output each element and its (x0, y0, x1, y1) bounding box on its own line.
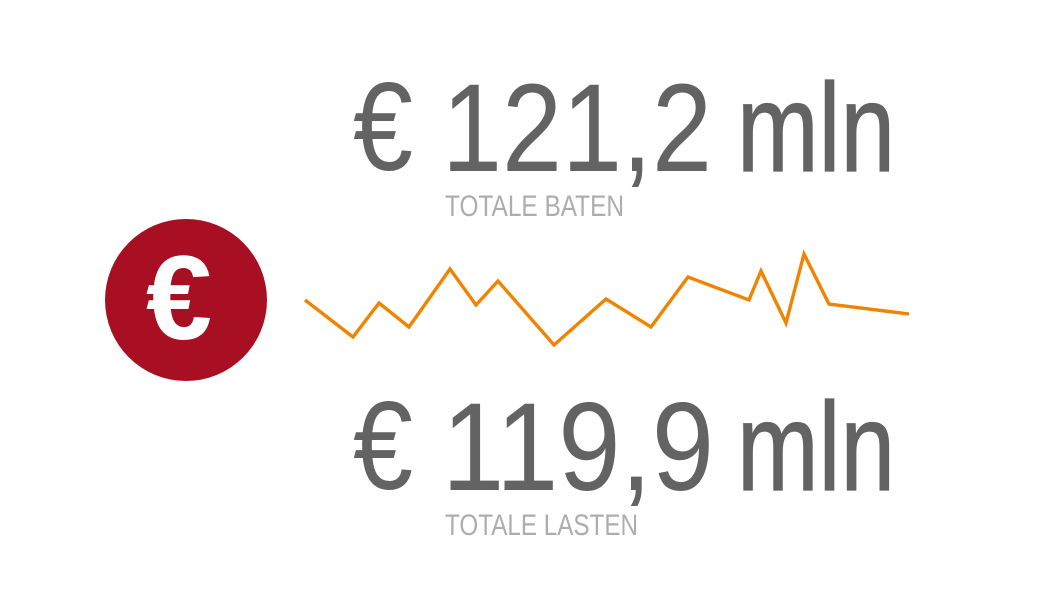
heading: total income amount: mln (737, 59, 895, 198)
heading: total expenses amount (353, 377, 895, 517)
heading: total income amount: € (353, 58, 413, 197)
heading: total income amount (353, 58, 895, 198)
icon: euro circle (105, 219, 267, 381)
icon: euro circle: € (146, 231, 212, 365)
line chart (305, 254, 909, 345)
heading: total expenses amount: 119,9 (442, 378, 714, 517)
heading: total expenses amount: € (353, 377, 413, 516)
label: total expenses: TOTALE LASTEN (445, 509, 638, 542)
label: total income: TOTALE BATEN (445, 190, 624, 223)
heading: total expenses amount: mln (737, 378, 895, 517)
heading: total income amount: 121,2 (442, 59, 712, 198)
